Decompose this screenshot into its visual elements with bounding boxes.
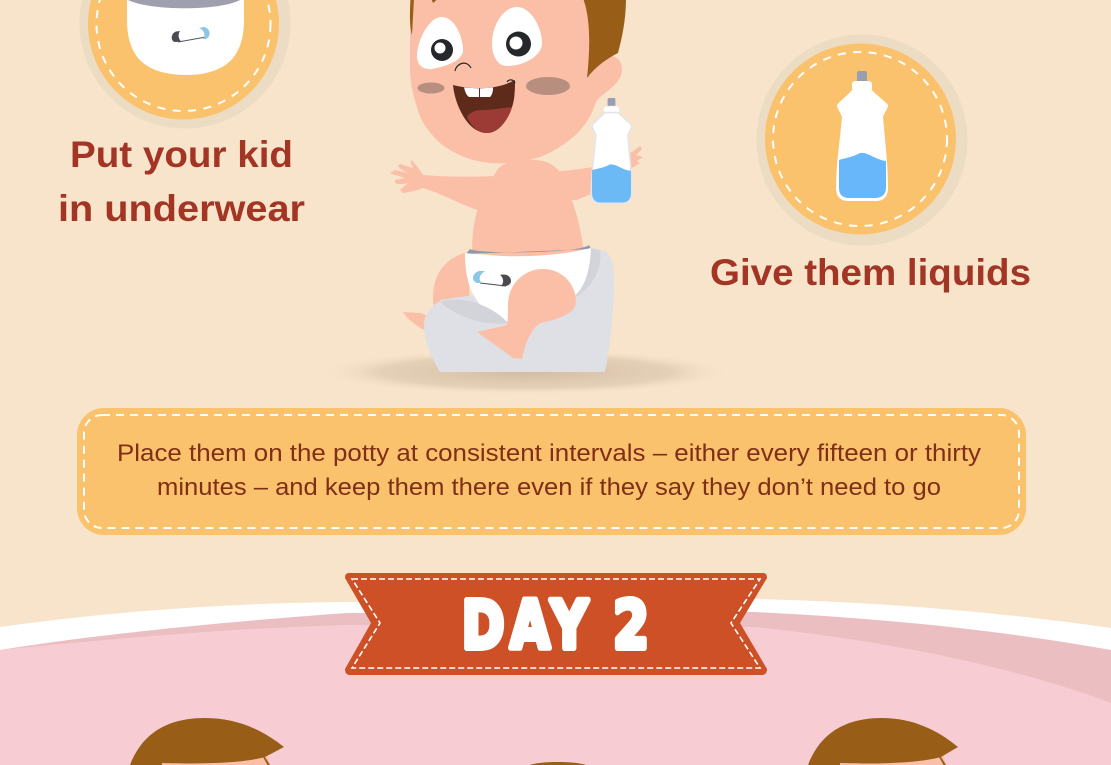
right leg and foot: [477, 269, 576, 359]
illustration: baby on potty: [318, 0, 734, 395]
illustration: right parent head: [808, 718, 958, 765]
illustration: left parent head: [130, 718, 284, 765]
cheeks: [418, 82, 444, 94]
illustration: centre child head: [530, 762, 586, 765]
callout: potty intervals: minutes – and keep them there even if they say they don’t need to go: [157, 474, 941, 501]
diaper: [465, 245, 591, 322]
icon: underwear badge: [80, 0, 290, 128]
ear: [585, 56, 622, 112]
right arm: [555, 146, 643, 200]
left arm: [390, 160, 500, 210]
callout: potty intervals: Place them on the potty at consistent intervals – either every fifteen or thirty: [117, 440, 982, 467]
mouth: [453, 80, 515, 133]
potty lobe shading: [440, 300, 508, 324]
head: [410, 0, 594, 163]
heading: put your kid in underwear: in underwear: [58, 188, 305, 229]
bottle: [591, 98, 632, 203]
potty front lobe: [424, 298, 530, 372]
nose: [455, 63, 471, 71]
ground shadow: [318, 349, 734, 395]
left thigh and foot: [403, 252, 470, 332]
eyes: [417, 7, 542, 69]
banner text: DAY 2: [462, 587, 649, 664]
hair: [583, 0, 626, 78]
heading: put your kid in underwear: [58, 134, 305, 229]
potty inner shading: [574, 248, 600, 298]
callout: potty intervals: [77, 408, 1026, 535]
heading: put your kid in underwear: Put your kid: [70, 134, 293, 175]
banner: day 2: [345, 573, 767, 675]
heading: give them liquids: Give them liquids: [710, 252, 1031, 293]
panel: day 2 background: [0, 599, 1111, 765]
icon: liquids bottle badge: [756, 34, 968, 246]
torso: [472, 160, 584, 258]
potty: [440, 250, 614, 372]
